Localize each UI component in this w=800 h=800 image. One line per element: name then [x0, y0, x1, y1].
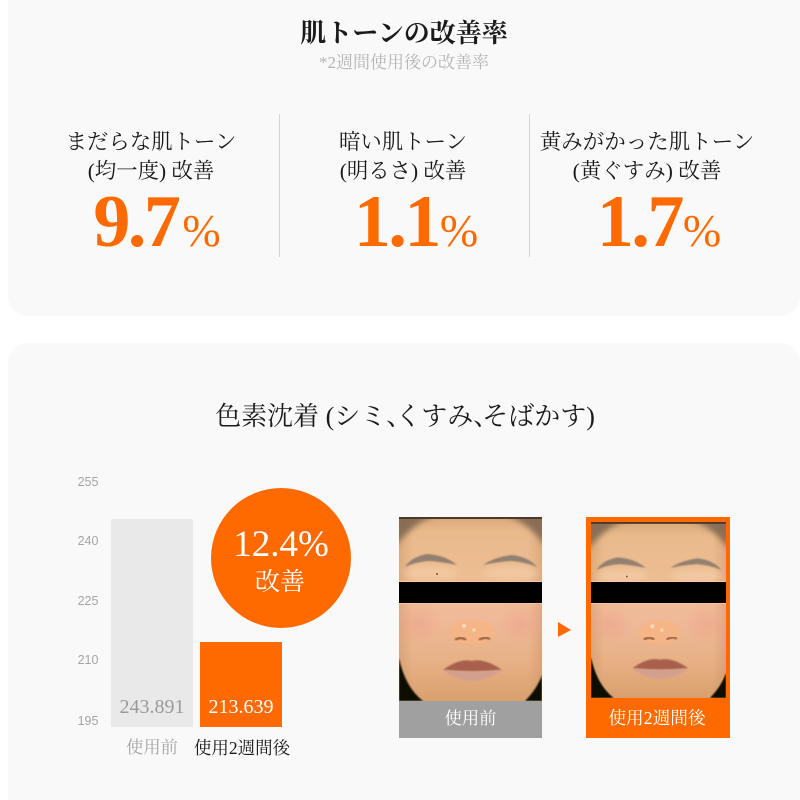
subtitle: after two weeks: *2週間使用後の改善率	[319, 53, 489, 72]
bar chart: 195	[78, 714, 98, 728]
metric: yellow skin tone	[540, 130, 754, 263]
bar label: after: 使用2週間後	[194, 738, 290, 758]
bar: after	[200, 642, 282, 727]
photo: after two weeks	[586, 517, 730, 738]
panel: pigmentation	[8, 343, 800, 800]
metric label	[339, 130, 467, 183]
privacy bar	[591, 582, 726, 603]
callout: 12.4% improvement	[211, 488, 351, 628]
bar chart: 225	[78, 594, 98, 608]
metric value: 1.1%	[354, 181, 478, 263]
title: skin tone improvement rate: 肌トーンの改善率	[300, 19, 508, 48]
bar value: after: 213.639	[208, 696, 274, 718]
arrow	[558, 622, 571, 637]
face image	[399, 517, 542, 701]
metric label: (均一度) 改善	[88, 159, 214, 183]
bar value: before: 243.891	[120, 696, 184, 718]
metric label: (黄ぐすみ) 改善	[573, 159, 721, 183]
bar label: before: 使用前	[126, 738, 178, 757]
panel: skin tone improvement	[8, 0, 800, 316]
metric label: 暗い肌トーン	[339, 130, 467, 154]
metric label: まだらな肌トーン	[66, 130, 236, 154]
bar chart	[78, 475, 290, 758]
metric label: (明るさ) 改善	[340, 159, 466, 183]
bar chart: 255	[78, 475, 98, 489]
bar: before	[111, 519, 193, 727]
metric label	[66, 130, 236, 183]
privacy bar	[399, 582, 542, 603]
caption: after: 使用2週間後	[608, 708, 706, 728]
metric: dark skin tone	[339, 130, 478, 263]
metric value: 1.7%	[597, 181, 721, 263]
bar chart: 210	[78, 653, 98, 667]
caption: before: 使用前	[445, 709, 496, 728]
callout label: 改善	[255, 569, 305, 596]
heading: pigmentation: 色素沈着 (シミ くすみ そばかす)	[215, 402, 595, 431]
metric label: 黄みがかった肌トーン	[540, 130, 754, 154]
metric: uneven skin tone	[66, 130, 236, 263]
metric label	[540, 130, 754, 183]
divider	[279, 114, 280, 257]
divider	[529, 114, 530, 257]
face image	[591, 522, 726, 698]
axis labels	[78, 475, 98, 728]
photo: before use	[399, 517, 542, 738]
callout value: 12.4%	[233, 524, 329, 565]
heading: pigmentation: 、	[386, 402, 412, 431]
metric value: 9.7%	[93, 181, 221, 263]
bar chart: 240	[78, 534, 98, 548]
heading: pigmentation: 、	[473, 402, 499, 431]
